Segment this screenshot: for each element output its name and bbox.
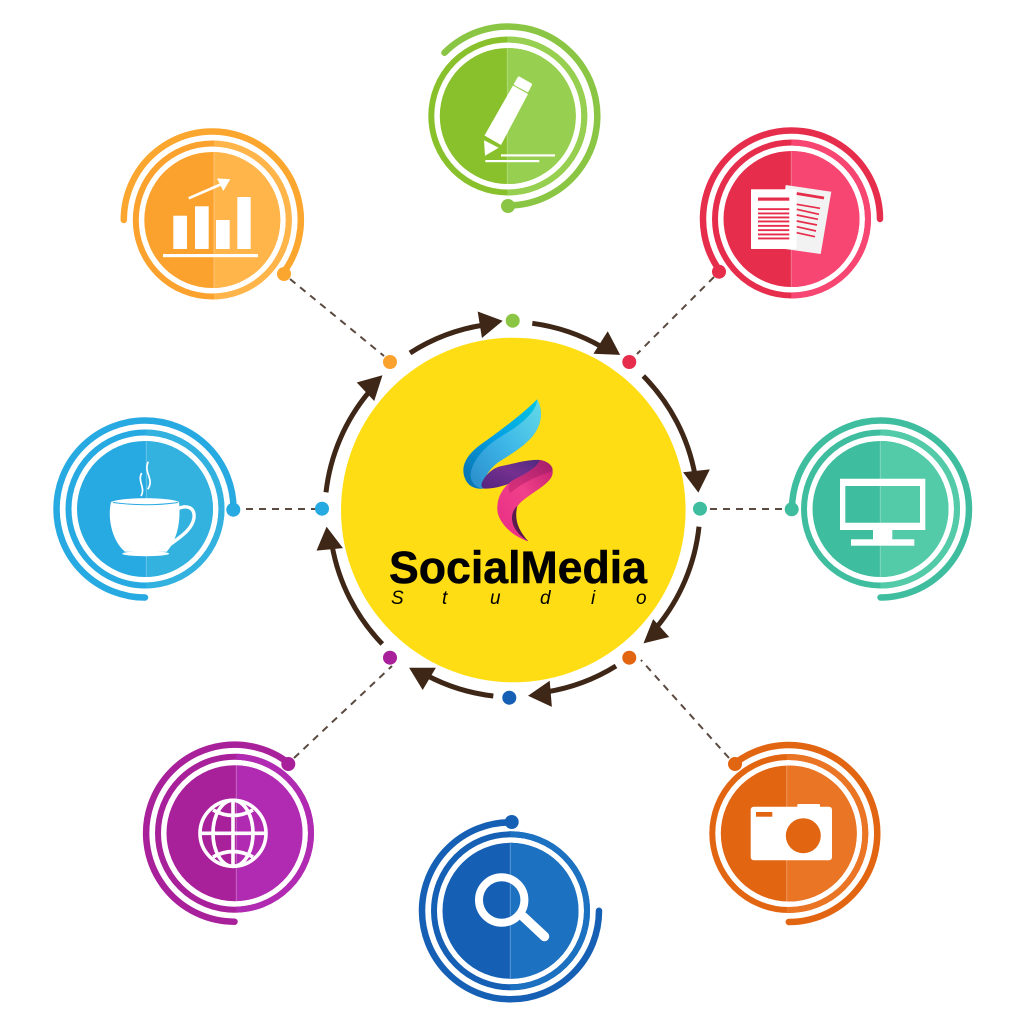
icon: magnifier bbox=[479, 877, 544, 936]
logo symbol bbox=[463, 399, 553, 541]
circular arrows bbox=[317, 312, 709, 706]
node: globe bbox=[146, 745, 311, 922]
icon: bar chart with arrow bbox=[163, 178, 258, 257]
node: analytics bbox=[124, 131, 301, 296]
icon: coffee cup bbox=[110, 462, 194, 556]
icon: monitor bbox=[840, 479, 925, 546]
logo wordmark: SocialMedia bbox=[389, 542, 648, 593]
central yellow circle bbox=[341, 338, 686, 682]
node: search bbox=[422, 815, 599, 999]
icon: globe bbox=[200, 800, 266, 866]
node: writing bbox=[431, 27, 597, 213]
logo subtitle: Studio bbox=[391, 588, 647, 609]
ring dots bbox=[315, 314, 707, 705]
icon: camera bbox=[751, 804, 832, 860]
node: monitor bbox=[785, 420, 969, 598]
icon: pencil bbox=[484, 78, 555, 162]
dashed connectors bbox=[246, 277, 786, 758]
icon: papers bbox=[751, 185, 831, 254]
node: camera bbox=[712, 745, 877, 922]
node: documents bbox=[703, 130, 880, 296]
node: coffee bbox=[57, 420, 240, 598]
